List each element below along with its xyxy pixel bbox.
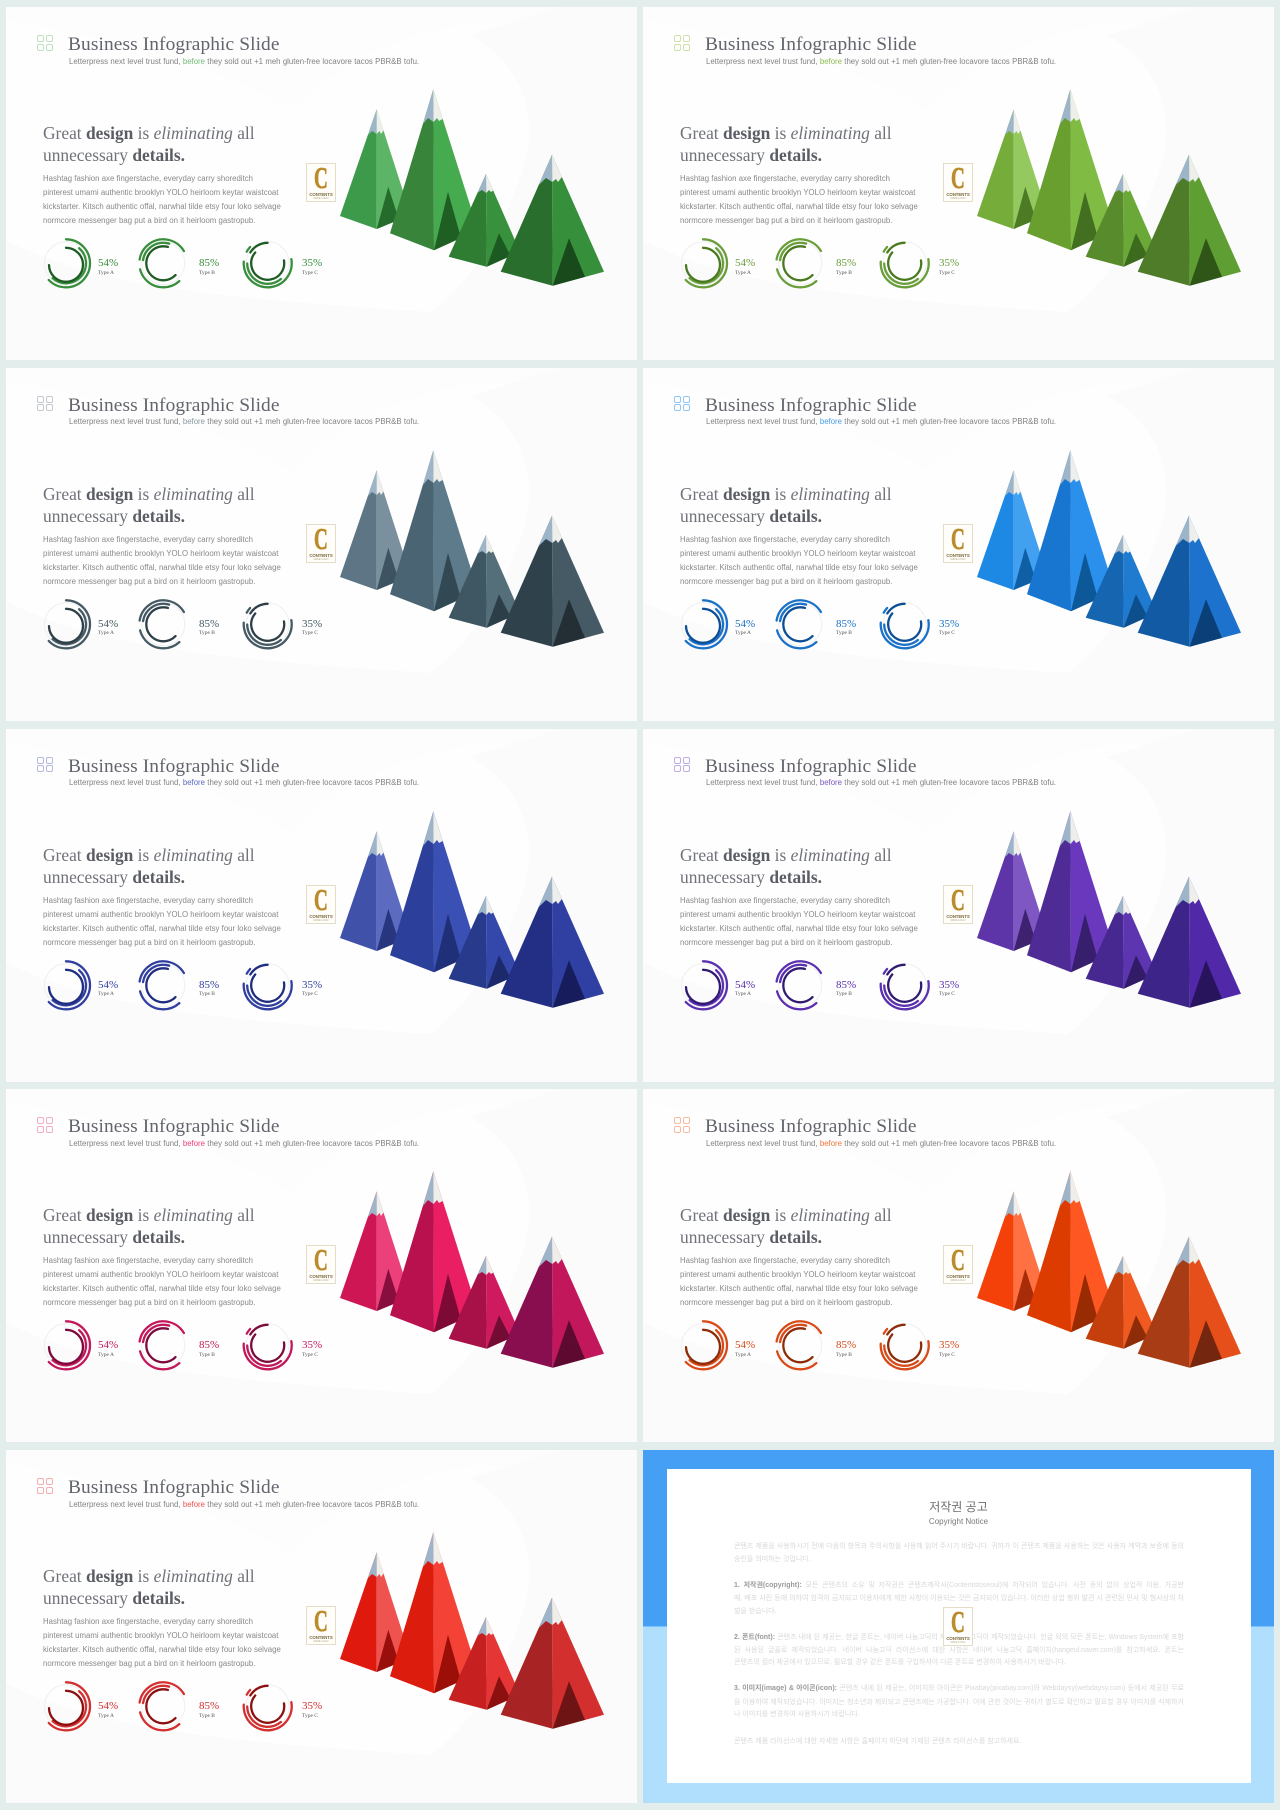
- ring charts: [6, 1450, 637, 1803]
- stat: Type C: Type C: [302, 1713, 318, 1719]
- body text: kickstarter. Kitsch authentic offal, narwhal tilde etsy four loko selvage: [680, 924, 918, 933]
- body text: kickstarter. Kitsch authentic offal, narwhal tilde etsy four loko selvage: [680, 563, 918, 572]
- subtitle: Letterpress next level trust fund, before they sold out +1 meh gluten-free locavore tacos PBR&B tofu.: [706, 778, 1056, 787]
- stat: Type B: Type B: [199, 630, 215, 636]
- stat: Type B: [836, 1338, 896, 1368]
- subtitle: Letterpress next level trust fund, before they sold out +1 meh gluten-free locavore tacos PBR&B tofu.: [69, 56, 419, 66]
- body text: Hashtag fashion axe fingerstache, everyday carry shoreditch: [43, 1617, 253, 1626]
- heading: [43, 844, 255, 888]
- body text: normcore messenger bag put a bird on it heirloom gastropub.: [680, 216, 892, 225]
- stat: Type B: Type B: [199, 270, 215, 276]
- subtitle: Letterpress next level trust fund, before they sold out +1 meh gluten-free locavore tacos PBR&B tofu.: [69, 778, 419, 787]
- stat: Type A: Type A: [735, 1352, 751, 1358]
- heading: [43, 1204, 255, 1248]
- stat: Type C: [302, 1338, 362, 1368]
- stat: Type B: [199, 257, 219, 276]
- stat: Type A: Type A: [98, 991, 114, 997]
- mountain chart: [977, 450, 1241, 647]
- stat: Type B: Type B: [836, 991, 852, 997]
- stat: Type B: [199, 1699, 259, 1729]
- stat: Type C: [302, 1699, 362, 1729]
- stat: Type C: Type C: [939, 270, 955, 276]
- clause 3 line 2: 을 이용하여 제작되었습니다. 이미지는 청소년과 제외되고 콘텐츠에는 가공합니다. 이에 관한 것이는 귀하가 별도로 확인하고 필요할 경우 이미지를 삭제하거: [734, 1699, 1184, 1706]
- notice footer: 콘텐츠 제품 라이선스에 대한 자세한 사항은 홈페이지 하단에 기재된 콘텐츠 라이선스를 참고하세요.: [734, 1738, 1021, 1745]
- body text: normcore messenger bag put a bird on it heirloom gastropub.: [43, 216, 255, 225]
- watermark badge: [943, 885, 973, 924]
- ring charts: [6, 1089, 637, 1442]
- stat: Type C: [939, 978, 999, 1008]
- body text: [43, 1615, 281, 1671]
- stat: Type C: Type C: [302, 630, 318, 636]
- panel background swirl: [643, 7, 1274, 360]
- panel: green slide: [6, 7, 637, 360]
- ring charts: [681, 599, 930, 650]
- stat: Type A: 54%: [98, 618, 118, 630]
- heading: unnecessary details.: [43, 506, 185, 526]
- icon: four squares: [674, 396, 690, 411]
- stat: Type A: [735, 618, 755, 636]
- watermark badge: [306, 1245, 336, 1284]
- body text: normcore messenger bag put a bird on it heirloom gastropub.: [680, 938, 892, 947]
- stat: Type A: [98, 618, 118, 636]
- watermark badge: [306, 885, 336, 924]
- body text: pinterest umami authentic brooklyn YOLO heirloom keytar waistcoat: [680, 188, 915, 197]
- stat: Type C: [302, 978, 362, 1008]
- body text: pinterest umami authentic brooklyn YOLO heirloom keytar waistcoat: [43, 1270, 278, 1279]
- title: Business Infographic Slide: [68, 395, 280, 416]
- clause 1 line 2: 매, 배포 사진 등에 의하여 엄격히 금지되고 이용자에게 제한 사항이 이용되는 것은 금지되어 있습니다. 이러한 상업 행위 발견 시 관련된 민사 및 형사상의 처: [734, 1595, 1184, 1602]
- mountain chart: [6, 729, 637, 1082]
- icon: four squares: [37, 396, 53, 411]
- watermark badge: [943, 524, 973, 563]
- title: Business Infographic Slide: [68, 756, 280, 777]
- body text: [43, 1254, 281, 1310]
- stat: Type B: Type B: [836, 1352, 852, 1358]
- watermark badge: [306, 1606, 336, 1645]
- stat: Type C: Type C: [939, 630, 955, 636]
- clause 1 line 3: 벌을 받습니다.: [734, 1608, 777, 1615]
- stat: Type B: 85%: [836, 1339, 856, 1351]
- panel background swirl: [6, 7, 637, 360]
- watermark badge: CONTENTS: [946, 1274, 970, 1279]
- title: Business Infographic Slide: [68, 1477, 280, 1498]
- heading: unnecessary details.: [43, 145, 185, 165]
- watermark badge: CONTENTS: [309, 553, 333, 558]
- body text: pinterest umami authentic brooklyn YOLO heirloom keytar waistcoat: [43, 1631, 278, 1640]
- body text: pinterest umami authentic brooklyn YOLO heirloom keytar waistcoat: [680, 1270, 915, 1279]
- watermark badge: [306, 524, 336, 563]
- body text: normcore messenger bag put a bird on it heirloom gastropub.: [43, 938, 255, 947]
- body text: [43, 174, 281, 225]
- mountain chart: [6, 1089, 637, 1442]
- heading: [680, 484, 892, 526]
- stat: Type C: [302, 618, 322, 636]
- title: Business Infographic Slide: [68, 34, 280, 55]
- heading: unnecessary details.: [43, 1588, 185, 1608]
- stat: Type A: Type A: [98, 270, 114, 276]
- subtitle: Letterpress next level trust fund, before they sold out +1 meh gluten-free locavore tacos PBR&B tofu.: [69, 1500, 419, 1509]
- body text: [680, 894, 918, 950]
- clause 1 line 1: 1. 저작권(copyright): 모든 콘텐츠의 소유 및 저작권은 콘텐츠제작사(Contentstoseoul)에 저작되어 있습니다. 사전 동의 없이 상업적 이용, 가공판: [734, 1582, 1184, 1589]
- body text: [43, 535, 281, 586]
- heading: Great design is eliminating all: [680, 123, 892, 143]
- stat: Type A: 54%: [98, 1339, 118, 1351]
- title: Business Infographic Slide: [705, 1116, 917, 1137]
- mountain chart: [643, 1089, 1274, 1442]
- stat: Type A: 54%: [735, 1339, 755, 1351]
- stat: Type B: 85%: [199, 618, 219, 630]
- panel background swirl: [6, 1089, 637, 1442]
- body text: Hashtag fashion axe fingerstache, everyday carry shoreditch: [680, 1256, 890, 1265]
- ring charts: [44, 238, 293, 288]
- body text: pinterest umami authentic brooklyn YOLO heirloom keytar waistcoat: [43, 549, 278, 558]
- watermark badge: CONTENTS: [309, 192, 333, 197]
- body text: normcore messenger bag put a bird on it heirloom gastropub.: [43, 1659, 255, 1668]
- watermark badge: MAKE LOGO: [313, 919, 328, 922]
- body text: kickstarter. Kitsch authentic offal, narwhal tilde etsy four loko selvage: [680, 1284, 918, 1293]
- heading: [43, 1565, 255, 1609]
- panel background swirl: [643, 1089, 1274, 1442]
- watermark badge: [943, 1245, 973, 1284]
- body text: kickstarter. Kitsch authentic offal, narwhal tilde etsy four loko selvage: [43, 563, 281, 572]
- body text: Hashtag fashion axe fingerstache, everyday carry shoreditch: [43, 174, 253, 183]
- stat: Type C: Type C: [939, 1352, 955, 1358]
- heading: unnecessary details.: [680, 867, 822, 887]
- stat: Type A: [735, 257, 755, 276]
- body text: pinterest umami authentic brooklyn YOLO heirloom keytar waistcoat: [680, 549, 915, 558]
- mountain chart: [340, 89, 604, 286]
- stat: Type B: [199, 618, 219, 636]
- icon: four squares: [674, 757, 690, 773]
- stat: Type B: 85%: [836, 257, 856, 269]
- watermark badge: CONTENTS: [946, 1636, 970, 1641]
- stat: Type A: 54%: [735, 257, 755, 269]
- stat: Type C: 35%: [302, 618, 322, 630]
- heading: Great design is eliminating all: [43, 123, 255, 143]
- panel: lime slide: [643, 7, 1274, 360]
- stat: Type C: 35%: [302, 1339, 322, 1351]
- stat: Type B: Type B: [199, 991, 215, 997]
- heading: unnecessary details.: [680, 145, 822, 165]
- heading: unnecessary details.: [680, 1227, 822, 1247]
- body text: [43, 894, 281, 950]
- stat: Type B: Type B: [836, 630, 852, 636]
- watermark badge: [943, 1607, 973, 1646]
- body text: [680, 1254, 918, 1310]
- body text: Hashtag fashion axe fingerstache, everyday carry shoreditch: [680, 896, 890, 905]
- heading: [680, 123, 892, 165]
- stat: Type C: Type C: [939, 991, 955, 997]
- watermark badge: CONTENTS: [309, 914, 333, 919]
- stat: Type C: [302, 257, 322, 276]
- subtitle: Letterpress next level trust fund, before they sold out +1 meh gluten-free locavore tacos PBR&B tofu.: [706, 417, 1056, 426]
- watermark badge: MAKE LOGO: [950, 1641, 966, 1644]
- body text: [680, 535, 918, 586]
- stat: Type B: [199, 1338, 259, 1368]
- stat: Type A: [735, 978, 795, 1008]
- ring charts: [6, 729, 637, 1082]
- watermark badge: MAKE LOGO: [313, 558, 328, 561]
- heading: unnecessary details.: [43, 1227, 185, 1247]
- stat: Type B: 85%: [199, 1339, 219, 1351]
- stat: Type C: 35%: [302, 257, 322, 269]
- watermark badge: [943, 163, 973, 202]
- stat: Type C: 35%: [939, 618, 959, 630]
- stat: Type C: Type C: [302, 270, 318, 276]
- clause 2 line 1: 2. 폰트(font): 콘텐츠 내에 된 제공는, 한글 폰트는, 네이버 나눔고딕의 제공, 맑은고딕이 제작되었습니다. 한글 외의 모든 폰트는, Windows System에 포함: [734, 1634, 1184, 1641]
- stat: Type A: 54%: [735, 618, 755, 630]
- panel background swirl: [643, 368, 1274, 721]
- notice card: [666, 1469, 1250, 1783]
- panel background swirl: [643, 729, 1274, 1082]
- body text: Hashtag fashion axe fingerstache, everyday carry shoreditch: [43, 896, 253, 905]
- stat: Type A: Type A: [98, 630, 114, 636]
- heading: Great design is eliminating all: [680, 1205, 892, 1225]
- subtitle: Letterpress next level trust fund, before they sold out +1 meh gluten-free locavore tacos PBR&B tofu.: [69, 1139, 419, 1148]
- stat: Type A: [98, 257, 118, 276]
- stat: Type A: Type A: [98, 1352, 114, 1358]
- heading: [43, 123, 255, 165]
- stat: Type C: 35%: [939, 1339, 959, 1351]
- mountain chart: [643, 729, 1274, 1082]
- title: Business Infographic Slide: [705, 395, 917, 416]
- panel: blue-grey slide: [6, 368, 637, 721]
- stat: Type C: 35%: [302, 979, 322, 991]
- heading: [43, 484, 255, 526]
- stat: Type B: [836, 257, 856, 276]
- ring charts: [643, 729, 1274, 1082]
- subtitle: Letterpress next level trust fund, before they sold out +1 meh gluten-free locavore tacos PBR&B tofu.: [69, 417, 419, 426]
- body text: kickstarter. Kitsch authentic offal, narwhal tilde etsy four loko selvage: [43, 1645, 281, 1654]
- stat: Type B: 85%: [199, 979, 219, 991]
- stat: Type B: 85%: [199, 1700, 219, 1712]
- stat: Type A: Type A: [98, 1713, 114, 1719]
- body text: kickstarter. Kitsch authentic offal, narwhal tilde etsy four loko selvage: [43, 202, 281, 211]
- watermark badge: MAKE LOGO: [313, 1640, 328, 1643]
- icon: four squares: [674, 1117, 690, 1133]
- panel background swirl: [6, 368, 637, 721]
- heading: [680, 1204, 892, 1248]
- mountain chart: [340, 450, 604, 647]
- watermark badge: CONTENTS: [946, 192, 970, 197]
- body text: Hashtag fashion axe fingerstache, everyday carry shoreditch: [680, 535, 890, 544]
- title: Business Infographic Slide: [68, 1116, 280, 1137]
- clause 3 line 3: 나 이미지를 변경하여 사용하시기 바랍니다.: [734, 1711, 860, 1718]
- heading: Great design is eliminating all: [680, 484, 892, 504]
- clause 2 line 3: 콘텐츠의 컬러 제공에서 있으므로, 필요할 경우 같은 폰트를 구입하셔야 다른 폰트로 변경하여 사용하시기 바랍니다.: [734, 1659, 1066, 1666]
- heading: Great design is eliminating all: [43, 1566, 255, 1586]
- mountain chart: [6, 1450, 637, 1803]
- stat: Type A: [735, 1338, 795, 1368]
- heading: Great design is eliminating all: [43, 484, 255, 504]
- panel: red slide: [6, 1450, 637, 1803]
- body text: normcore messenger bag put a bird on it heirloom gastropub.: [43, 1298, 255, 1307]
- body text: kickstarter. Kitsch authentic offal, narwhal tilde etsy four loko selvage: [43, 1284, 281, 1293]
- body text: pinterest umami authentic brooklyn YOLO heirloom keytar waistcoat: [43, 910, 278, 919]
- watermark badge: MAKE LOGO: [950, 919, 966, 922]
- panel background swirl: [6, 729, 637, 1082]
- title: Business Infographic Slide: [705, 756, 917, 777]
- body text: normcore messenger bag put a bird on it heirloom gastropub.: [680, 577, 892, 586]
- stat: Type A: 54%: [98, 1700, 118, 1712]
- watermark badge: [306, 163, 336, 202]
- stat: Type B: 85%: [836, 618, 856, 630]
- body text: Hashtag fashion axe fingerstache, everyday carry shoreditch: [680, 174, 890, 183]
- stat: Type C: 35%: [939, 979, 959, 991]
- heading: Great design is eliminating all: [680, 845, 892, 865]
- body text: kickstarter. Kitsch authentic offal, narwhal tilde etsy four loko selvage: [43, 924, 281, 933]
- stat: Type B: Type B: [199, 1352, 215, 1358]
- watermark badge: CONTENTS: [946, 553, 970, 558]
- ring charts: [681, 238, 930, 288]
- body text: normcore messenger bag put a bird on it heirloom gastropub.: [680, 1298, 892, 1307]
- watermark badge: CONTENTS: [309, 1274, 333, 1279]
- icon: four squares: [37, 1117, 53, 1133]
- icon: four squares: [37, 35, 53, 51]
- panel: indigo slide: [6, 729, 637, 1082]
- icon: four squares: [674, 35, 690, 51]
- notice title: 저작권 공고: [929, 1500, 988, 1514]
- stat: Type B: Type B: [836, 270, 852, 276]
- stat: Type A: 54%: [98, 257, 118, 269]
- body text: kickstarter. Kitsch authentic offal, narwhal tilde etsy four loko selvage: [680, 202, 918, 211]
- stat: Type C: Type C: [302, 991, 318, 997]
- stat: Type B: [199, 978, 259, 1008]
- panel: orange slide: [643, 1089, 1274, 1442]
- body text: [680, 174, 918, 225]
- stat: Type C: 35%: [302, 1700, 322, 1712]
- title: Business Infographic Slide: [705, 34, 917, 55]
- stat: Type B: 85%: [836, 979, 856, 991]
- panel: blue slide: [643, 368, 1274, 721]
- heading: Great design is eliminating all: [43, 1205, 255, 1225]
- body text: Hashtag fashion axe fingerstache, everyday carry shoreditch: [43, 535, 253, 544]
- stat: Type B: [836, 978, 896, 1008]
- body text: pinterest umami authentic brooklyn YOLO heirloom keytar waistcoat: [43, 188, 278, 197]
- body text: pinterest umami authentic brooklyn YOLO heirloom keytar waistcoat: [680, 910, 915, 919]
- notice subtitle: Copyright Notice: [929, 1517, 988, 1526]
- watermark badge: MAKE LOGO: [950, 558, 966, 561]
- watermark badge: MAKE LOGO: [950, 197, 966, 200]
- stat: Type A: 54%: [735, 979, 755, 991]
- heading: [680, 844, 892, 888]
- stat: Type B: Type B: [199, 1713, 215, 1719]
- ring charts: [643, 1089, 1274, 1442]
- subtitle: Letterpress next level trust fund, before they sold out +1 meh gluten-free locavore tacos PBR&B tofu.: [706, 1139, 1056, 1148]
- stat: Type C: [939, 1338, 999, 1368]
- stat: Type A: Type A: [735, 991, 751, 997]
- stat: Type C: [939, 257, 959, 276]
- stat: Type B: 85%: [199, 257, 219, 269]
- stat: Type A: [98, 1699, 158, 1729]
- panel: pink slide: [6, 1089, 637, 1442]
- body text: normcore messenger bag put a bird on it heirloom gastropub.: [43, 577, 255, 586]
- stat: Type A: Type A: [735, 270, 751, 276]
- watermark badge: MAKE LOGO: [313, 197, 328, 200]
- watermark badge: MAKE LOGO: [950, 1279, 966, 1282]
- notice intro end: 승인을 의미하는 것입니다.: [734, 1556, 811, 1563]
- heading: unnecessary details.: [43, 867, 185, 887]
- stat: Type A: [98, 978, 158, 1008]
- stat: Type A: [98, 1338, 158, 1368]
- icon: four squares: [37, 757, 53, 773]
- mountain chart: [977, 89, 1241, 286]
- stat: Type A: 54%: [98, 979, 118, 991]
- subtitle: Letterpress next level trust fund, before they sold out +1 meh gluten-free locavore tacos PBR&B tofu.: [706, 56, 1056, 66]
- stat: Type A: Type A: [735, 630, 751, 636]
- heading: unnecessary details.: [680, 506, 822, 526]
- stat: Type B: [836, 618, 856, 636]
- clause 2 line 2: 된 사용된 글꼴로 제작되었습니다. 네이버 나눔고딕 라이선스에 대한 사항은 네이버 나눔고딕 홈페이지(hangeul.naver.com)를 참고하세요. 폰트는: [734, 1647, 1184, 1654]
- panel: copyright notice: [643, 1450, 1274, 1803]
- stat: Type C: 35%: [939, 257, 959, 269]
- stat: Type C: [939, 618, 959, 636]
- watermark badge: MAKE LOGO: [313, 1279, 328, 1282]
- ring charts: [44, 599, 293, 650]
- watermark badge: CONTENTS: [946, 914, 970, 919]
- stat: Type C: Type C: [302, 1352, 318, 1358]
- panel: purple slide: [643, 729, 1274, 1082]
- panel background swirl: [6, 1450, 637, 1803]
- body text: Hashtag fashion axe fingerstache, everyday carry shoreditch: [43, 1256, 253, 1265]
- heading: Great design is eliminating all: [43, 845, 255, 865]
- watermark badge: CONTENTS: [309, 1635, 333, 1640]
- icon: four squares: [37, 1478, 53, 1494]
